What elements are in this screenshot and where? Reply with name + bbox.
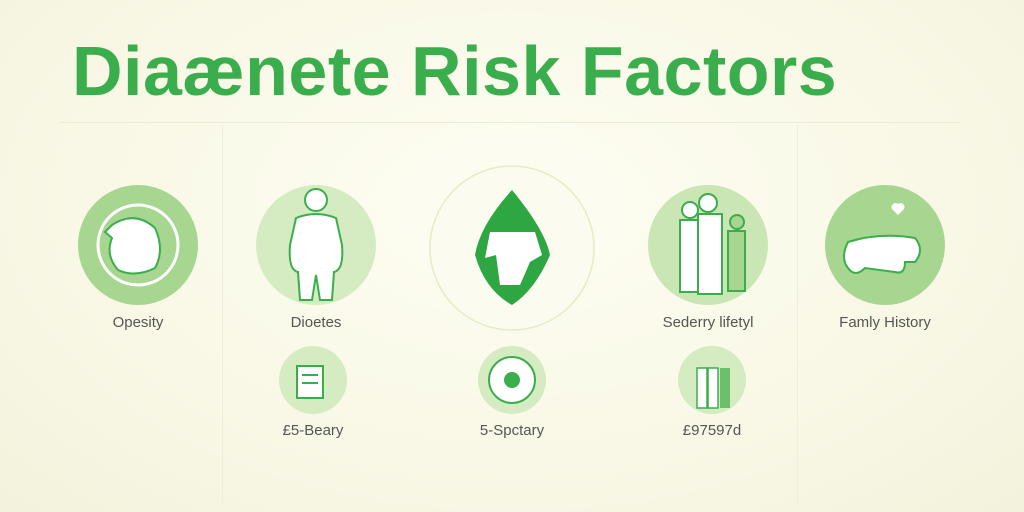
icon: small 1	[279, 346, 347, 414]
icon: family history	[825, 185, 945, 305]
label: obesity: Opesity	[113, 314, 163, 331]
label: sedentary: Sederry lifetyl	[663, 314, 753, 331]
icon: family	[648, 185, 768, 305]
icon: center diamond	[430, 166, 594, 330]
label: family history: Famly History	[839, 314, 931, 331]
icon: obesity	[78, 185, 198, 305]
label: small 2: 5-Spctary	[480, 422, 544, 439]
icon: small 3	[678, 346, 746, 414]
icon: small 2	[478, 346, 546, 414]
title: Diaænete Risk Factors	[72, 32, 837, 110]
icon: diabetes person	[256, 185, 376, 305]
label: small 3: £97597d	[683, 422, 741, 439]
label: small 1: £5-Beary	[283, 422, 343, 439]
label: diabetes: Dioetes	[291, 314, 341, 331]
